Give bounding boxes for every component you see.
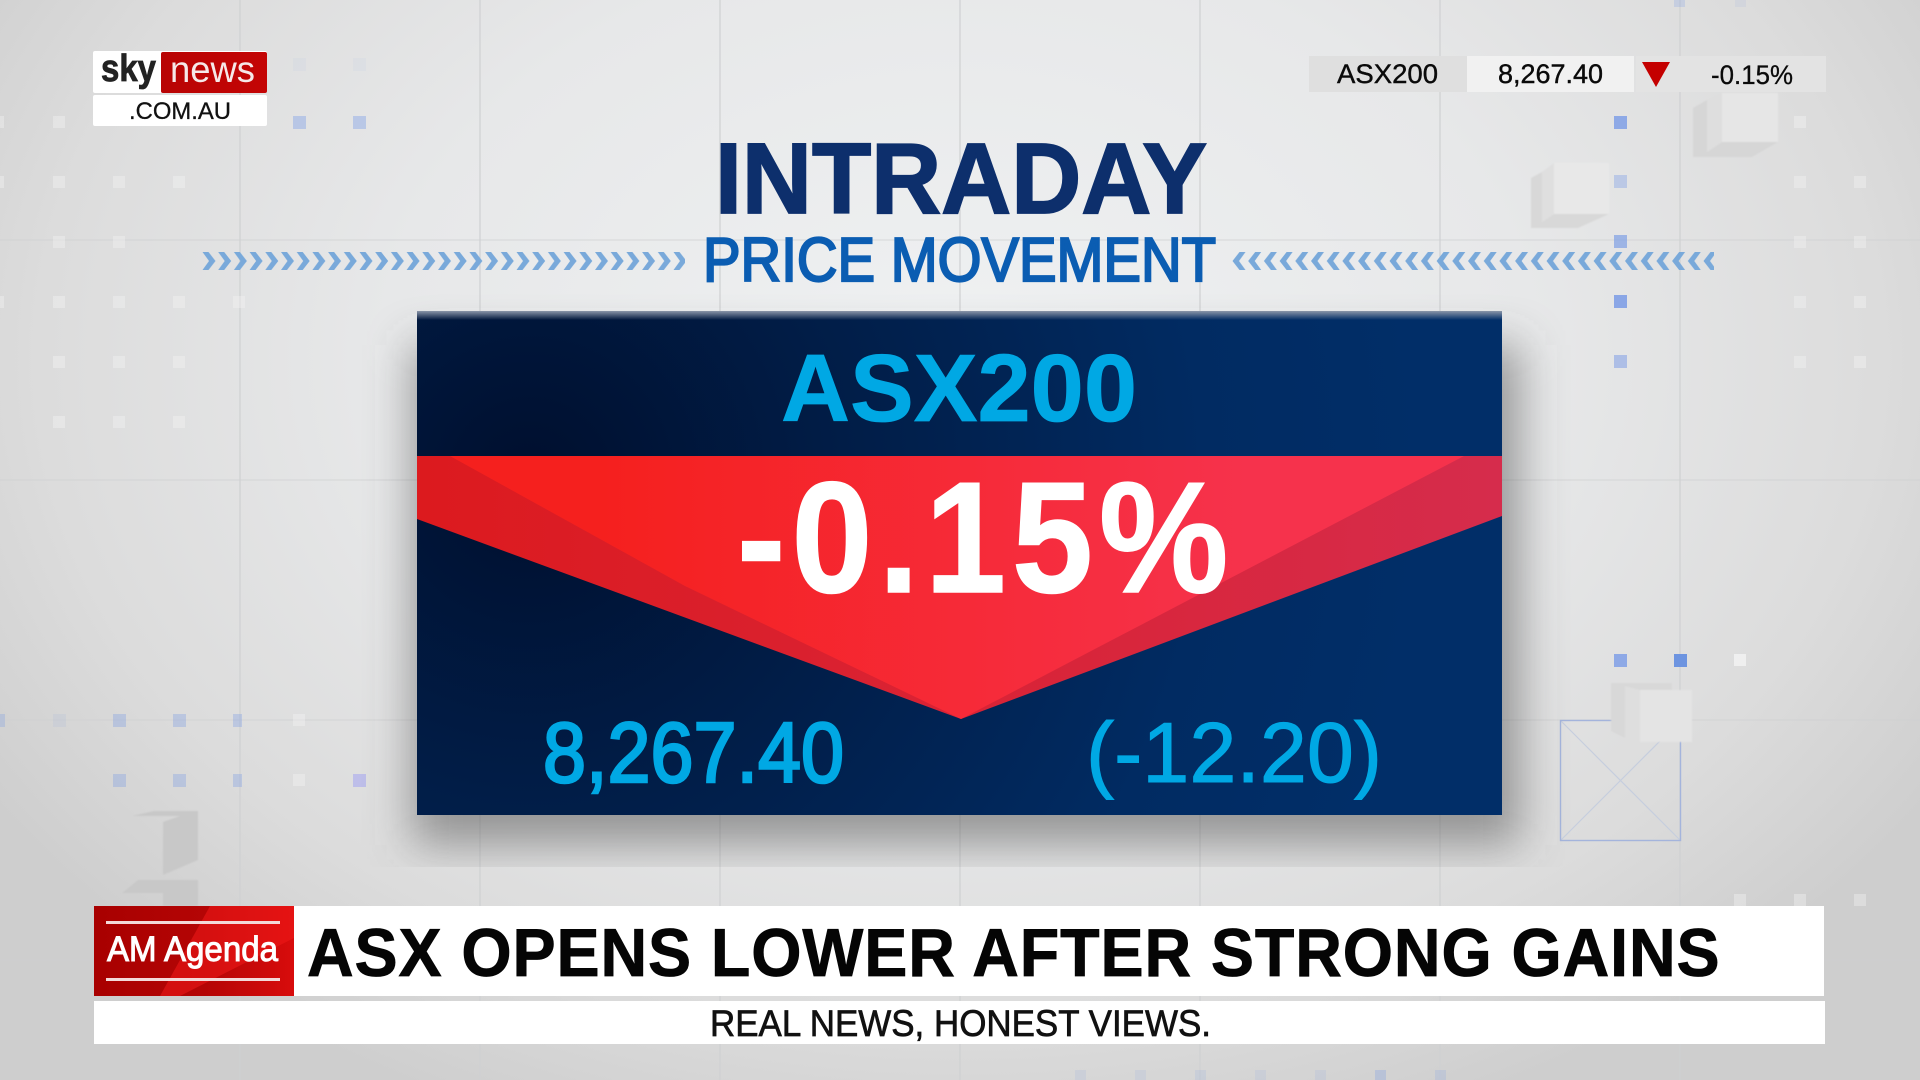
logo: sky news: news xyxy=(170,49,255,90)
panel: ASX200 index xyxy=(417,311,1502,815)
subtitle: PRICE MOVEMENT xyxy=(703,226,1216,295)
decorative cube: middle right xyxy=(1531,163,1609,228)
panel shadow xyxy=(412,345,1520,845)
index value: 8,267.40 xyxy=(543,706,844,801)
headline bar: ASX OPENS LOWER AFTER STRONG GAINS xyxy=(307,916,1720,991)
ticker strip: 8,267.40 xyxy=(1498,59,1603,89)
tag: AM Agenda xyxy=(94,906,294,996)
decorative cube: lower right xyxy=(1611,683,1692,742)
panel heading: ASX200 xyxy=(781,335,1137,442)
percent change: -0.15% xyxy=(737,450,1228,626)
title: INTRADAY xyxy=(715,123,1207,235)
ticker strip: ASX200 xyxy=(1337,59,1438,89)
tag: AM Agenda: AM Agenda xyxy=(107,930,279,969)
decorative cube: upper right xyxy=(1693,93,1778,157)
background pale squares xyxy=(0,116,1866,906)
logo: sky news: sky xyxy=(101,48,156,90)
logo: sky news: .COM.AU xyxy=(129,98,231,125)
outlined crossed square xyxy=(1560,720,1680,840)
decorative cube: lower left xyxy=(122,811,198,906)
point change: (-12.20) xyxy=(1086,706,1382,801)
tagline bar: REAL NEWS, HONEST VIEWS. xyxy=(710,1003,1211,1044)
icon: down triangle xyxy=(1642,62,1670,87)
left chevrons xyxy=(202,252,685,270)
logo: sky news xyxy=(93,48,267,126)
ticker strip: -0.15% xyxy=(1711,60,1793,90)
red arrow xyxy=(417,456,1502,719)
right chevrons xyxy=(1232,252,1714,270)
ticker strip xyxy=(1309,56,1826,92)
tagline bar xyxy=(94,1001,1825,1044)
